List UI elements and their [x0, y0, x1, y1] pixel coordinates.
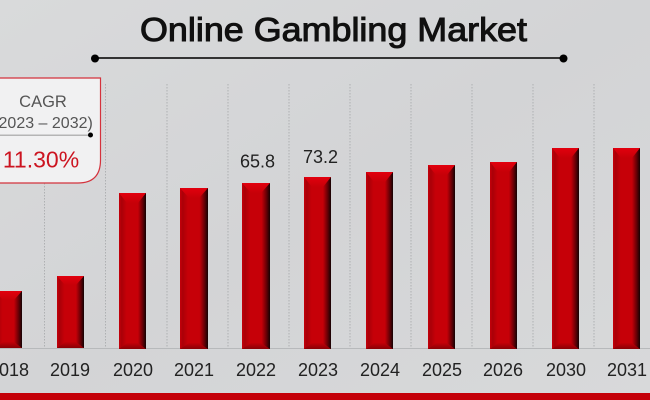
x axis year labels	[0, 360, 647, 380]
bar 2020	[119, 193, 146, 349]
CAGR value: 11.30%	[3, 146, 79, 172]
callout: CAGR	[0, 78, 100, 183]
bar 2031	[613, 148, 640, 349]
bar 2018	[0, 291, 22, 348]
bar chart	[0, 148, 640, 349]
x axis year labels: 2023	[298, 360, 338, 380]
CAGR label: CAGR	[19, 93, 67, 111]
title: Online Gambling Market	[140, 11, 527, 48]
value label 2022: 65.8	[240, 152, 275, 172]
bar 2021	[180, 188, 208, 349]
callout divider	[0, 132, 93, 138]
bar 2026	[490, 162, 517, 349]
bar 2019	[57, 276, 84, 348]
x axis year labels: 2020	[113, 360, 153, 380]
bar 2022	[242, 183, 270, 349]
title underline	[91, 54, 568, 62]
x axis year labels: 2024	[360, 360, 400, 380]
x axis year labels: 2025	[422, 360, 462, 380]
x axis year labels: 2026	[483, 360, 523, 380]
x axis year labels: 2021	[174, 360, 214, 380]
bar 2023	[304, 177, 331, 349]
x axis year labels: 2030	[546, 360, 586, 380]
x axis year labels: 2022	[236, 360, 276, 380]
bottom red band	[0, 393, 650, 400]
value label 2023: 73.2	[303, 147, 338, 167]
x axis year labels: 2031	[607, 360, 647, 380]
x axis year labels: 2019	[50, 360, 90, 380]
bar 2030	[552, 148, 579, 349]
bar 2024	[366, 172, 393, 349]
bar 2025	[428, 165, 455, 349]
